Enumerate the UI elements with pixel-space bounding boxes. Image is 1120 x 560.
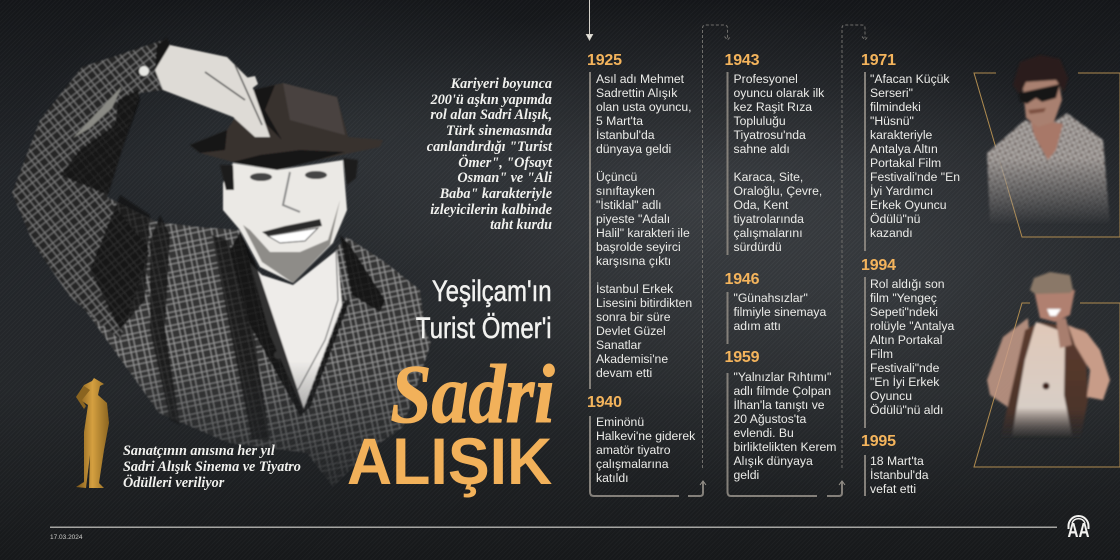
text 1946: filmiyle sinemaya — [734, 305, 826, 319]
year 1925: 1925 — [587, 52, 622, 69]
text 1943: Profesyonel — [734, 72, 798, 86]
text 1943: Karaca, Site, — [734, 170, 803, 184]
name: Sadri: Sadri — [391, 348, 555, 441]
dashed link: column 2 to 3 — [842, 25, 868, 468]
text 1971 — [870, 72, 960, 240]
text 1925: piyeste "Adalı — [596, 212, 670, 226]
face — [223, 160, 347, 283]
year 1995: 1995 — [861, 433, 896, 450]
text 1959: 20 Ağustos'ta — [734, 412, 806, 426]
date: 17.03.2024 — [50, 534, 83, 541]
text 1971: İyi Yardımcı — [870, 184, 933, 198]
intro text: izleyicilerin kalbinde — [430, 202, 552, 218]
text 1959: "Yalnızlar Rıhtımı" — [734, 370, 831, 384]
text 1994: Rol aldığı son — [870, 277, 945, 291]
hat — [203, 84, 382, 163]
text 1994: rolüyle "Antalya — [870, 319, 954, 333]
text 1995: vefat etti — [870, 482, 916, 496]
text 1940: Eminönü — [596, 415, 644, 429]
award caption: Ödülleri veriliyor — [123, 475, 224, 491]
text 1943: sürdürdü — [734, 240, 782, 254]
text 1925 — [596, 72, 692, 380]
text 1925: Akademisi'ne — [596, 352, 668, 366]
column 3 — [861, 52, 960, 496]
text 1925: Asıl adı Mehmet — [596, 72, 684, 86]
timeline connectors — [586, 0, 868, 496]
subtitle: Turist Ömer'i — [416, 312, 552, 345]
text 1994: Ödülü"nü aldı — [870, 403, 943, 417]
photo: 1994 portrait — [987, 272, 1110, 440]
text 1946: adım attı — [734, 319, 781, 333]
chest — [250, 250, 342, 410]
text 1943: Topluluğu — [734, 114, 786, 128]
text 1994: Film — [870, 347, 893, 361]
text 1925: dünyaya geldi — [596, 142, 671, 156]
text 1994: Sepeti"ndeki — [870, 305, 938, 319]
text 1959 — [734, 370, 836, 482]
statuette: gold award figure — [76, 378, 109, 488]
text 1959: geldi — [734, 468, 759, 482]
text 1925: Halil" karakteri ile — [596, 226, 690, 240]
text 1971: filmindeki — [870, 100, 921, 114]
hand — [155, 45, 270, 137]
text 1959: Alışık dünyaya — [734, 454, 813, 468]
text 1971: "Hüsnü" — [870, 114, 914, 128]
text 1943: Oraloğlu, Çevre, — [734, 184, 822, 198]
text 1943: kez Raşit Rıza — [734, 100, 812, 114]
text 1959: birliktelikten Kerem — [734, 440, 836, 454]
text 1925: Lisesini bitirdikten — [596, 296, 692, 310]
year 1946: 1946 — [724, 271, 759, 288]
text 1971: Erkek Oyuncu — [870, 198, 947, 212]
text 1925: Sadrettin Alışık — [596, 86, 677, 100]
text 1925: İstanbul'da — [596, 128, 655, 142]
text 1943: çalışmalarını — [734, 226, 803, 240]
year 1959: 1959 — [724, 349, 759, 366]
raised arm sleeve — [12, 40, 163, 340]
award caption — [123, 443, 301, 491]
frame: 1971 photo — [974, 73, 1120, 237]
award caption: Sanatçının anısına her yıl — [123, 443, 275, 459]
text 1971: Festivali'nde "En — [870, 170, 960, 184]
text 1940: Halkevi'ne giderek — [596, 429, 695, 443]
intro text: 200'ü aşkın yapımda — [431, 92, 552, 108]
text 1925: olan usta oyuncu, — [596, 100, 692, 114]
text 1959: İlhan'la tanıştı ve — [734, 398, 825, 412]
year 1943: 1943 — [724, 52, 759, 69]
text 1925: devam etti — [596, 366, 652, 380]
text 1995: 18 Mart'ta — [870, 454, 924, 468]
text 1994 — [870, 277, 954, 417]
text 1995 — [870, 454, 929, 496]
intro text: Osman" ve "Ali — [457, 170, 552, 186]
award caption: Sadri Alışık Sinema ve Tiyatro — [123, 459, 301, 475]
footer rule — [50, 526, 1057, 528]
frame: 1994 photo — [974, 303, 1120, 467]
intro text: Kariyeri boyunca — [451, 76, 552, 92]
text 1994: Festivali"nde — [870, 361, 939, 375]
text 1971: karakteriyle — [870, 128, 932, 142]
text 1971: "Afacan Küçük — [870, 72, 950, 86]
intro text: rol alan Sadri Alışık, — [430, 107, 552, 123]
year 1994: 1994 — [861, 257, 896, 274]
text 1959: evlendi. Bu — [734, 426, 794, 440]
intro text: Baba" karakteriyle — [440, 186, 552, 202]
text 1994: film "Yengeç — [870, 291, 937, 305]
subtitle — [416, 275, 552, 345]
intro text: canlandırdığı "Turist — [427, 139, 552, 155]
text 1971: Portakal Film — [870, 156, 941, 170]
text 1943: Oda, Kent — [734, 198, 788, 212]
text 1995: İstanbul'da — [870, 468, 929, 482]
text 1943: sahne aldı — [734, 142, 790, 156]
text 1971: Ödülü"nü — [870, 212, 920, 226]
text 1925: Üçüncü — [596, 170, 637, 184]
photo: 1971 portrait — [987, 55, 1110, 225]
dashed link: column 1 to 2 — [702, 25, 730, 468]
subtitle: Yeşilçam'ın — [432, 275, 552, 308]
arrow: start of timeline — [586, 0, 592, 40]
text 1971: kazandı — [870, 226, 913, 240]
AA logo: AA — [1068, 520, 1090, 542]
intro text: Ömer", "Ofsayt — [458, 155, 552, 171]
text 1946: "Günahsızlar" — [734, 291, 808, 305]
intro text — [427, 76, 552, 233]
text 1994: "En İyi Erkek — [870, 375, 939, 389]
intro text: Türk sinemasında — [446, 123, 552, 139]
column 1 — [587, 52, 696, 485]
AA logo — [1068, 516, 1090, 542]
text 1925: Devlet Güzel — [596, 324, 666, 338]
text 1925: "İstiklal" adlı — [596, 198, 662, 212]
text 1925: sınıftayken — [596, 184, 655, 198]
text 1925: sonra bir süre — [596, 310, 671, 324]
text 1959: adlı filmde Çolpan — [734, 384, 831, 398]
text 1925: 5 Mart'ta — [596, 114, 643, 128]
text 1971: Antalya Altın — [870, 142, 938, 156]
column 2 — [724, 52, 836, 482]
text 1943: oyuncu olarak ilk — [734, 86, 824, 100]
text 1940 — [596, 415, 696, 485]
text 1943 — [734, 72, 824, 254]
text 1940: çalışmalarına — [596, 457, 668, 471]
text 1994: Oyuncu — [870, 389, 912, 403]
text 1943: tiyatrolarında — [734, 212, 804, 226]
text 1925: Sanatlar — [596, 338, 641, 352]
text 1925: karşısına çıktı — [596, 254, 671, 268]
name: Alışık: ALIŞIK — [346, 424, 552, 498]
text 1940: katıldı — [596, 471, 629, 485]
text 1925: başrolde seyirci — [596, 240, 681, 254]
intro text: taht kurdu — [490, 217, 552, 233]
shirt body — [78, 197, 431, 487]
text 1971: Serseri" — [870, 86, 913, 100]
year 1971: 1971 — [861, 52, 896, 69]
year 1940: 1940 — [587, 394, 622, 411]
text 1994: Altın Portakal — [870, 333, 942, 347]
text 1940: amatör tiyatro — [596, 443, 671, 457]
text 1943: Tiyatrosu'nda — [734, 128, 806, 142]
text 1925: İstanbul Erkek — [596, 282, 673, 296]
text 1946 — [734, 291, 826, 333]
